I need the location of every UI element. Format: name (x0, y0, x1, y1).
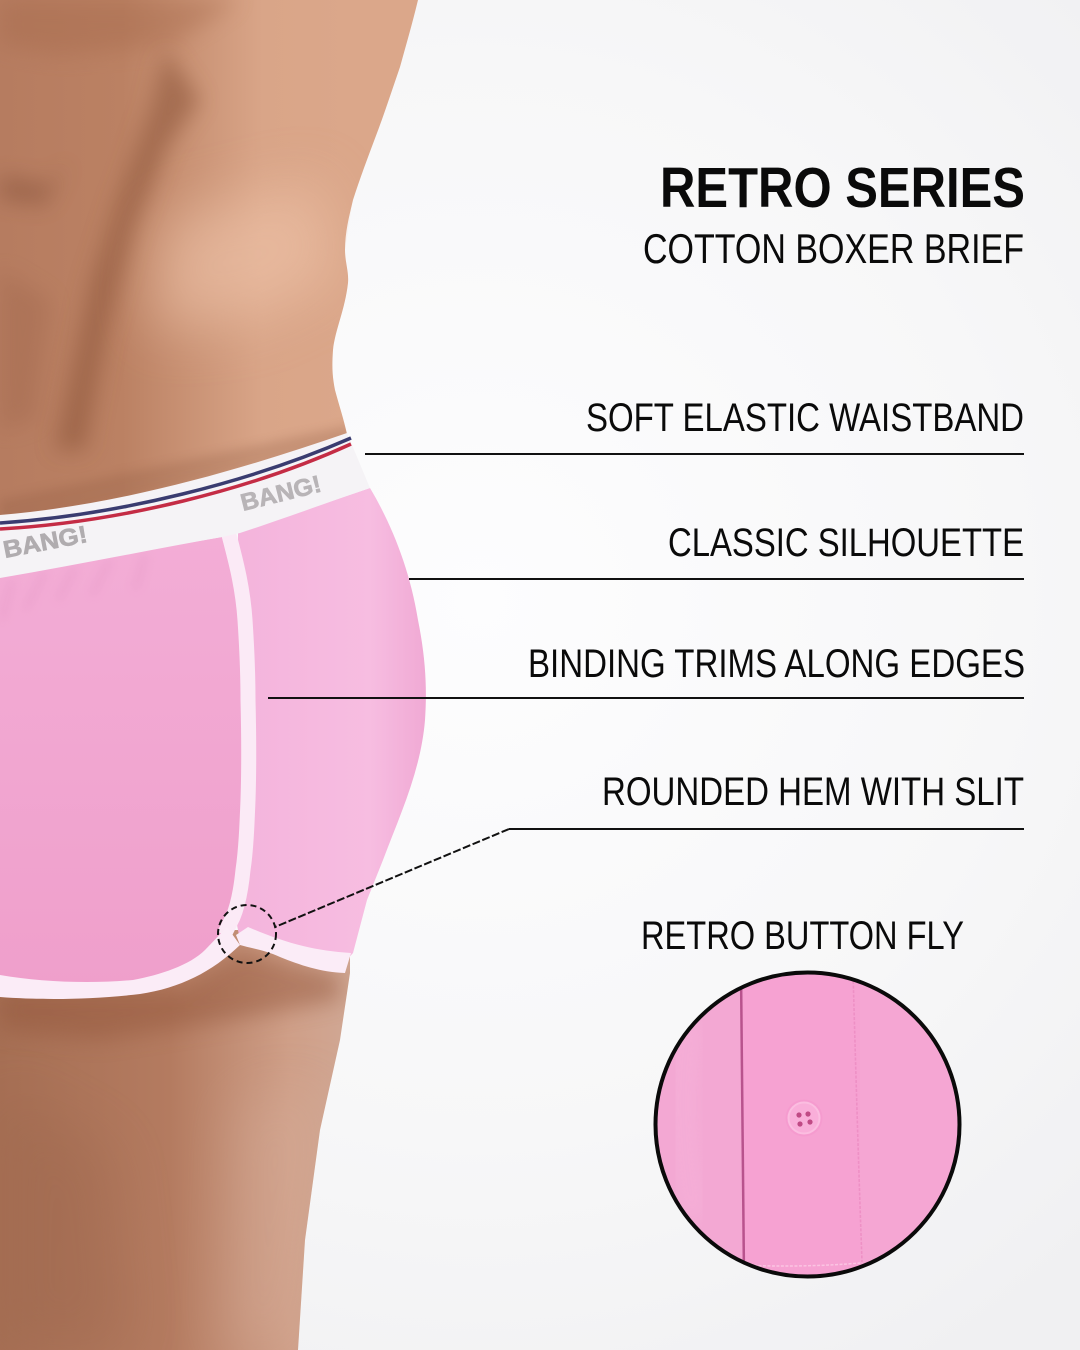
torso (0, 0, 418, 530)
waistband logo left: BANG! (1, 521, 90, 564)
waistband (0, 433, 370, 578)
leg (0, 930, 350, 1350)
callout: retro button fly: RETRO BUTTON FLY (641, 914, 964, 958)
bottom stitch (745, 1263, 860, 1266)
side piping trim (224, 535, 249, 935)
shorts back panel (235, 488, 426, 962)
shorts front panel (0, 537, 249, 988)
fly seam left (741, 972, 744, 1276)
waistband logo right: BANG! (238, 471, 324, 517)
leg shading (0, 950, 340, 1350)
icon: button (788, 1102, 820, 1134)
waistband stripes (0, 438, 351, 523)
hem trim right (236, 927, 351, 973)
torso shading (0, 0, 350, 530)
hem trim left (0, 927, 240, 999)
fly seam right (853, 972, 862, 1262)
callout: rounded hem with slit (218, 770, 1024, 963)
detail circle: button fly (654, 972, 964, 1278)
waistband gathers (2, 555, 145, 620)
title: RETRO SERIES (660, 156, 1025, 220)
photo: model in pink boxer brief (0, 0, 426, 1350)
